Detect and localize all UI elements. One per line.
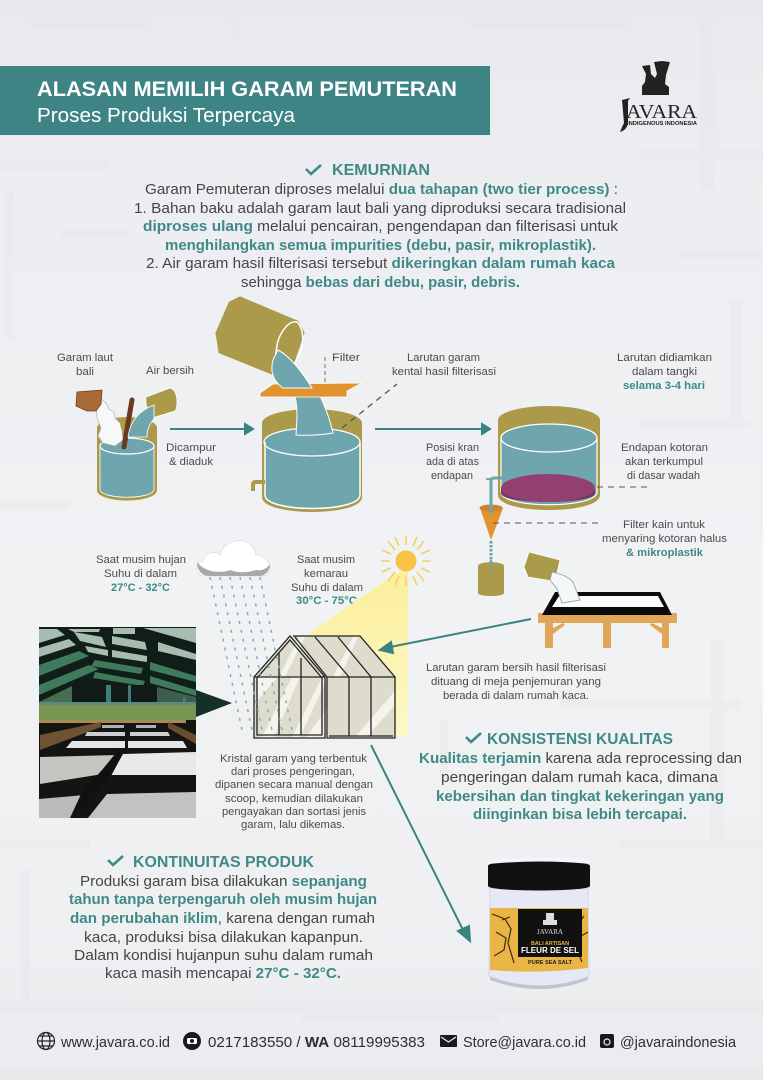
label: dicampur: & diaduk	[169, 456, 214, 468]
text: Kontinuitas body	[69, 873, 377, 982]
footer: website: www.javara.co.id	[60, 1034, 170, 1051]
tap	[253, 482, 265, 491]
text: Kemurnian body: menghilangkan semua impurities (debu, pasir, mikroplastik).	[165, 237, 596, 254]
water stream	[128, 405, 154, 437]
label: larutan didiamkan	[617, 352, 712, 392]
product: Fleur de Sel jar: BALI ARTISAN	[531, 941, 569, 947]
leader: sediment	[597, 486, 652, 488]
footer: email: Store@javara.co.id	[463, 1034, 586, 1051]
label: endapan kotoran	[621, 442, 708, 482]
leader: cloth filter	[493, 522, 603, 524]
arrow: table to greenhouse	[380, 619, 531, 653]
label: dicampur: Dicampur	[166, 442, 216, 454]
label: kristal garam: pengayakan dan sortasi jenis	[222, 806, 367, 818]
section: Konsistensi kualitas	[419, 731, 742, 823]
header subtitle: Proses Produksi Terpercaya	[37, 105, 296, 127]
label: musim kemarau: kemarau	[304, 568, 348, 580]
text: Konsistensi body	[419, 750, 742, 823]
icon: water cup	[146, 388, 177, 418]
label: filter kain: Filter kain untuk	[623, 519, 706, 531]
label: garam laut bali: bali	[76, 366, 94, 378]
label: larutan bersih: berada di dalam rumah kaca.	[443, 690, 589, 702]
label: posisi kran	[426, 442, 479, 482]
text: Kemurnian body: sehingga bebas dari debu, pasir, debris.	[241, 274, 520, 291]
icon: check	[466, 733, 481, 742]
footer: phone: 0217183550 / WA 08119995383	[208, 1034, 425, 1051]
label: larutan bersih: Larutan garam bersih hasil filterisasi	[426, 662, 606, 674]
heading: Kemurnian: KEMURNIAN	[332, 162, 430, 179]
leader: filtered solution	[342, 384, 397, 428]
sun beam	[305, 570, 408, 737]
text: Kontinuitas body: kaca masih mencapai 27°C - 32°C.	[105, 965, 341, 982]
label: musim hujan: Saat musim hujan	[96, 554, 186, 566]
icon: mail	[440, 1035, 457, 1047]
heading: Kontinuitas: KONTINUITAS PRODUK	[133, 854, 315, 871]
text: Kontinuitas body: kaca, produksi bisa dilakukan kapanpun.	[84, 929, 363, 946]
label: kristal garam: garam, lalu dikemas.	[241, 819, 345, 831]
filter	[260, 383, 362, 397]
text: Kemurnian body: diproses ulang melalui pencairan, pengendapan dan filterisasi untuk	[143, 218, 619, 235]
label: filter kain: menyaring kotoran halus	[602, 533, 728, 545]
label: kristal garam: scoop, kemudian dilakukan	[225, 793, 363, 805]
text: Kemurnian body: 2. Air garam hasil filterisasi tersebut dikeringkan dalam rumah kaca	[146, 255, 616, 272]
text: Kontinuitas body: Produksi garam bisa dilakukan sepanjang	[80, 873, 367, 890]
icon: check	[306, 165, 321, 174]
label: kristal garam	[215, 753, 373, 831]
logo: Javara: AVARA	[626, 101, 698, 123]
diagram: large tank with filter	[217, 298, 362, 512]
text: Konsistensi body: Kualitas terjamin karena ada reprocessing dan	[419, 750, 742, 767]
label: garam laut bali: Garam laut	[57, 352, 113, 364]
label: musim kemarau: Saat musim	[297, 554, 355, 566]
icon: salt pouring	[96, 398, 123, 446]
section: Kemurnian	[134, 162, 626, 291]
label: larutan garam kental: kental hasil filterisasi	[392, 366, 496, 378]
product: Fleur de Sel jar: JAVARA	[537, 928, 563, 936]
label: musim hujan: Suhu di dalam	[104, 568, 177, 580]
label: filter: Filter	[332, 352, 360, 364]
header band	[0, 66, 490, 135]
label: musim kemarau: 30°C - 75°C	[296, 595, 357, 607]
text: Kontinuitas body: dan perubahan iklim, karena dengan rumah	[70, 910, 375, 927]
label: posisi kran: endapan	[431, 470, 473, 482]
label: air bersih: Air bersih	[146, 365, 194, 377]
icon: sun	[381, 536, 431, 586]
label: larutan garam kental: Larutan garam	[407, 352, 480, 364]
label: musim kemarau: Suhu di dalam	[291, 582, 363, 594]
photo: greenhouse interior	[39, 627, 196, 818]
label: posisi kran: ada di atas	[426, 456, 479, 468]
label: musim hujan	[96, 554, 186, 594]
icon: stirring stick	[124, 400, 132, 447]
heading: Konsistensi: KONSISTENSI KUALITAS	[487, 731, 673, 748]
label: filter	[325, 352, 360, 384]
pointer: photo to greenhouse	[196, 690, 232, 717]
label: musim hujan: 27°C - 32°C	[111, 582, 170, 594]
text: Konsistensi body: pengeringan dalam rumah kaca, dimana	[441, 769, 719, 786]
sediment	[501, 488, 595, 502]
label: endapan kotoran: Endapan kotoran	[621, 442, 708, 454]
icon: check	[108, 856, 123, 865]
label: larutan didiamkan: selama 3-4 hari	[623, 380, 705, 392]
label: larutan garam kental	[392, 352, 496, 378]
label: endapan kotoran: akan terkumpul	[625, 456, 703, 468]
stream above filter	[272, 350, 312, 388]
icon: instagram	[600, 1034, 614, 1048]
icon: phone	[183, 1032, 201, 1050]
icon: rain cloud	[197, 541, 293, 735]
collection cup	[478, 562, 504, 596]
header title: ALASAN MEMILIH GARAM PEMUTERAN	[37, 78, 457, 101]
arrow: mix to tank	[170, 424, 253, 434]
stream below filter	[295, 396, 333, 435]
label: kristal garam: dipanen secara manual dengan	[215, 779, 373, 791]
diagram: mixing bucket	[76, 388, 177, 500]
label: endapan kotoran: di dasar wadah	[627, 470, 700, 482]
arrow: greenhouse to product	[371, 745, 470, 941]
product: Fleur de Sel jar: PURE SEA SALT	[528, 960, 572, 966]
product: Fleur de Sel jar: FLEUR DE SEL	[521, 946, 579, 955]
pouring bucket	[217, 298, 303, 375]
label: larutan didiamkan: Larutan didiamkan	[617, 352, 712, 364]
label: larutan bersih: dituang di meja penjemuran yang	[431, 676, 601, 688]
cup pouring brine	[524, 552, 560, 581]
diagram: cloth filter funnel	[478, 481, 504, 596]
label: dicampur	[166, 442, 216, 468]
label: musim kemarau	[291, 554, 363, 607]
tap and drip	[491, 478, 503, 517]
text: Kontinuitas body: Dalam kondisi hujanpun suhu dalam rumah	[74, 947, 373, 964]
text: Kemurnian body: Garam Pemuteran diproses melalui dua tahapan (two tier process) :	[145, 181, 618, 198]
diagram: drying table	[524, 552, 677, 648]
text: Kemurnian body: 1. Bahan baku adalah garam laut bali yang diproduksi secara tradisional	[134, 200, 626, 217]
label: kristal garam: Kristal garam yang terbentuk	[220, 753, 368, 765]
text: Kemurnian body	[134, 181, 626, 291]
diagram: settling tank	[486, 406, 600, 517]
text: Kontinuitas body: tahun tanpa terpengaruh oleh musim hujan	[69, 891, 377, 908]
product: Fleur de Sel jar	[488, 858, 590, 989]
text: Konsistensi body: diinginkan bisa lebih tercapai.	[473, 806, 687, 823]
logo: Javara: INDIGENOUS INDONESIA	[627, 121, 697, 127]
logo: Javara	[620, 61, 698, 132]
footer: instagram: @javaraindonesia	[620, 1034, 737, 1051]
label: filter kain: & mikroplastik	[626, 547, 704, 559]
label: larutan didiamkan: dalam tangki	[632, 366, 697, 378]
footer contacts	[38, 1032, 737, 1051]
label: kristal garam: dari proses pengeringan,	[231, 766, 355, 778]
icon: globe	[38, 1032, 54, 1050]
label: posisi kran: Posisi kran	[426, 442, 479, 454]
diagram: greenhouse	[254, 636, 395, 738]
label: larutan bersih	[426, 662, 606, 702]
section: Kontinuitas produk	[69, 854, 377, 982]
label: garam laut bali	[57, 352, 113, 378]
arrow: tank to settling tank	[375, 424, 490, 434]
text: Konsistensi body: kebersihan dan tingkat kekeringan yang	[436, 788, 724, 805]
icon: salt scoop	[76, 390, 102, 411]
label: filter kain	[602, 519, 728, 559]
rain	[210, 577, 293, 735]
